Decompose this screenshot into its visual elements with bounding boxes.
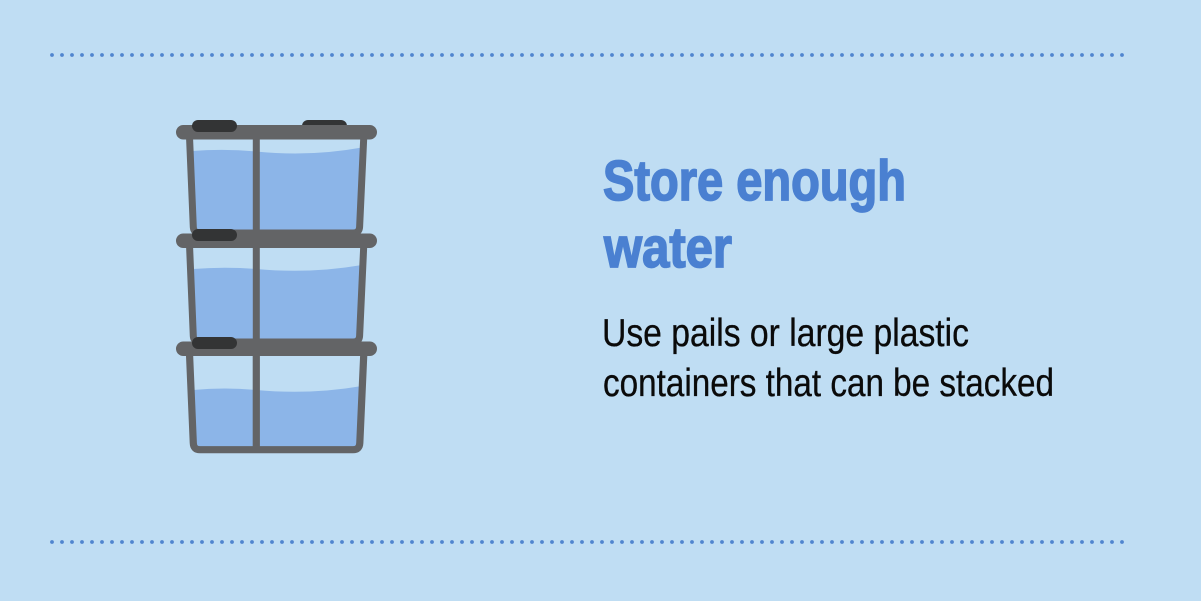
body text bbox=[602, 312, 1054, 405]
water: top container bbox=[192, 148, 362, 232]
bottom dotted line bbox=[52, 540, 1126, 544]
front handle, middle lid bbox=[192, 229, 237, 241]
top dotted line bbox=[52, 53, 1126, 57]
top lid bbox=[176, 125, 377, 140]
icon: stacked water containers bbox=[176, 120, 377, 450]
heading line 2: water bbox=[603, 216, 732, 280]
water: bottom container bbox=[193, 386, 362, 447]
rear handle, top lid bbox=[302, 120, 347, 132]
middle lid bbox=[176, 234, 377, 248]
heading bbox=[603, 149, 906, 280]
front handle, bottom lid bbox=[192, 337, 237, 349]
bottom container frame bbox=[189, 349, 364, 450]
water: middle container bbox=[193, 265, 362, 342]
body line 2: containers that can be stacked bbox=[603, 362, 1054, 405]
front handle, top lid bbox=[192, 120, 237, 132]
body line 1: Use pails or large plastic bbox=[602, 312, 969, 355]
middle container frame bbox=[189, 240, 364, 344]
top container frame bbox=[189, 132, 364, 234]
heading line 1: Store enough bbox=[603, 149, 906, 213]
bottom lid bbox=[176, 342, 377, 356]
